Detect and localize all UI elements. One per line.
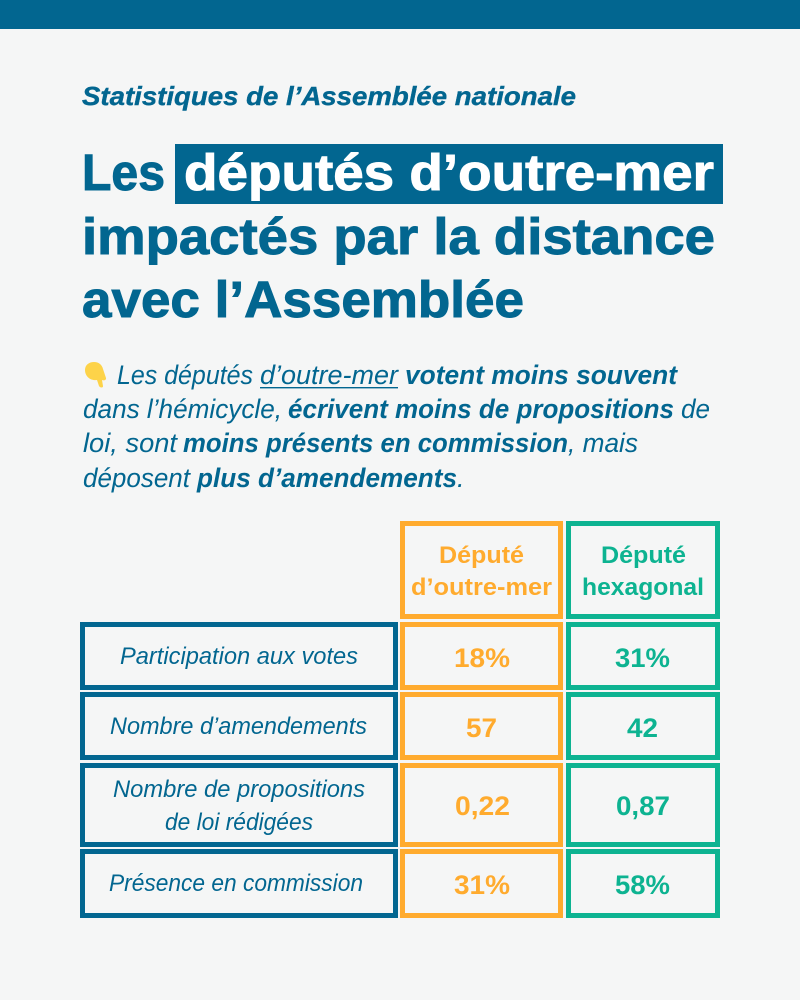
row label: nombre d'amendements: Nombre d’amendements [110,713,367,740]
value: 42 [568,694,718,758]
header: député d'outre-mer: Député [439,542,524,569]
intro paragraph: dans l’hémicycle, [83,394,282,424]
value: 31%: 31% [615,643,670,673]
title [82,144,723,328]
header: député hexagonal [568,524,718,616]
value: 58% [568,852,718,916]
intro paragraph: . [457,463,465,493]
top bar [0,0,800,29]
title: impactés par la distance [82,208,715,265]
value: 31%: 31% [454,870,510,900]
row label: présence en commission [82,852,396,916]
row label: nombre de propositions de loi rédigées [82,766,396,844]
row label: nombre de propositions de loi rédigées: Nombre de propositions [113,776,365,803]
row label: participation aux votes [82,624,396,688]
value: 0,87: 0,87 [616,791,670,821]
value: 31% [568,624,718,688]
intro paragraph: Les députés [117,360,253,390]
intro paragraph: votent moins souvent [405,360,678,390]
value: 0,87 [568,766,718,844]
title: Les [82,144,165,201]
icon: pointing hand [85,362,106,388]
value: 0,22: 0,22 [455,791,510,821]
intro paragraph: déposent [83,463,191,493]
row label: nombre d'amendements [82,694,396,758]
intro paragraph [83,360,710,493]
row label: participation aux votes: Participation aux votes [120,643,358,670]
value: 18%: 18% [454,643,510,673]
subtitle: Statistiques de l’Assemblée nationale [82,81,576,111]
intro paragraph: loi, sont [83,428,179,458]
underlined term: d’outre-mer [260,360,399,390]
header: député hexagonal: hexagonal [582,574,704,601]
value: 57: 57 [466,713,497,743]
intro paragraph: moins présents en commission [183,428,568,458]
value: 0,22 [402,766,560,844]
intro paragraph: plus d’amendements [196,463,457,493]
table [82,524,718,916]
title: avec l’Assemblée [82,271,524,328]
title highlight: députés d’outre-mer [184,144,714,201]
value: 58%: 58% [615,870,670,900]
row label: présence en commission: Présence en commission [109,870,363,897]
value: 57 [402,694,560,758]
intro paragraph: de [681,394,710,424]
intro paragraph: , mais [568,428,638,458]
row label: nombre de propositions de loi rédigées: de loi rédigées [165,809,313,836]
header: député hexagonal: Député [601,542,686,569]
value: 18% [402,624,560,688]
value: 42: 42 [627,713,658,743]
header: député d'outre-mer: d’outre-mer [411,574,552,601]
intro paragraph: écrivent moins de propositions [288,394,674,424]
value: 31% [402,852,560,916]
header: député d'outre-mer [402,524,560,616]
